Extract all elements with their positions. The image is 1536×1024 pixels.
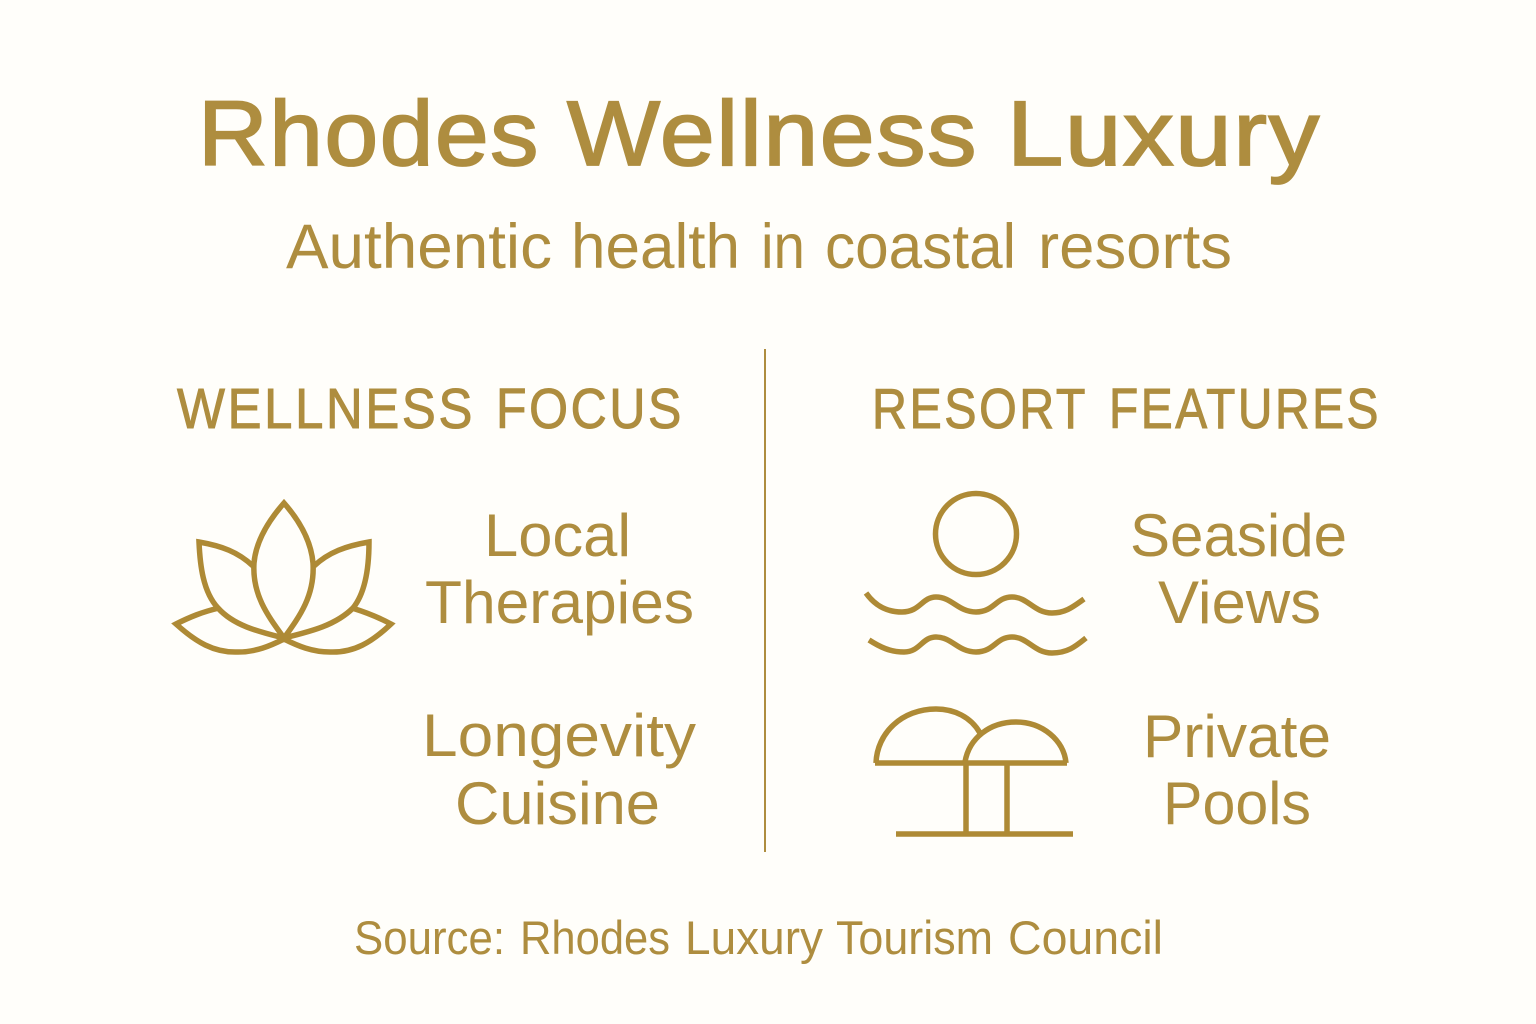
icon: beach umbrellas bbox=[875, 709, 1073, 834]
source note bbox=[354, 911, 1163, 964]
label: longevity cuisine: Longevity bbox=[422, 702, 696, 769]
source note: Luxury bbox=[685, 911, 823, 964]
label: seaside views: Seaside bbox=[1130, 502, 1347, 569]
divider between columns bbox=[764, 349, 766, 852]
label: longevity cuisine bbox=[422, 702, 696, 837]
subtitle: coastal bbox=[825, 212, 1016, 282]
title: Wellness bbox=[567, 83, 978, 185]
label: seaside views bbox=[1130, 502, 1347, 636]
label: local therapies: Local bbox=[484, 502, 631, 569]
heading: resort features: RESORT bbox=[872, 377, 1088, 441]
subtitle: health bbox=[571, 212, 740, 282]
source note: Council bbox=[1008, 911, 1163, 964]
label: private pools: Pools bbox=[1163, 770, 1311, 837]
title: Rhodes bbox=[198, 83, 540, 185]
heading: resort features: FEATURES bbox=[1109, 377, 1381, 441]
subtitle: Authentic bbox=[286, 212, 552, 282]
title: Luxury bbox=[1007, 83, 1321, 185]
heading: wellness focus bbox=[177, 377, 684, 441]
title bbox=[198, 83, 1321, 185]
source note: Tourism bbox=[836, 911, 993, 964]
icon: lotus bbox=[176, 503, 391, 652]
label: longevity cuisine: Cuisine bbox=[455, 770, 660, 837]
subtitle bbox=[286, 212, 1232, 282]
subtitle: in bbox=[761, 212, 805, 282]
label: private pools: Private bbox=[1143, 703, 1331, 770]
heading: resort features bbox=[872, 377, 1381, 441]
label: private pools bbox=[1143, 703, 1331, 837]
source note: Source: bbox=[354, 911, 505, 964]
source note: Rhodes bbox=[520, 911, 670, 964]
label: local therapies: Therapies bbox=[425, 569, 694, 636]
icon: sun over waves bbox=[866, 494, 1086, 653]
subtitle: resorts bbox=[1038, 212, 1232, 282]
label: seaside views: Views bbox=[1158, 569, 1321, 636]
heading: wellness focus: FOCUS bbox=[496, 377, 684, 441]
heading: wellness focus: WELLNESS bbox=[177, 377, 475, 441]
label: local therapies bbox=[425, 502, 694, 636]
